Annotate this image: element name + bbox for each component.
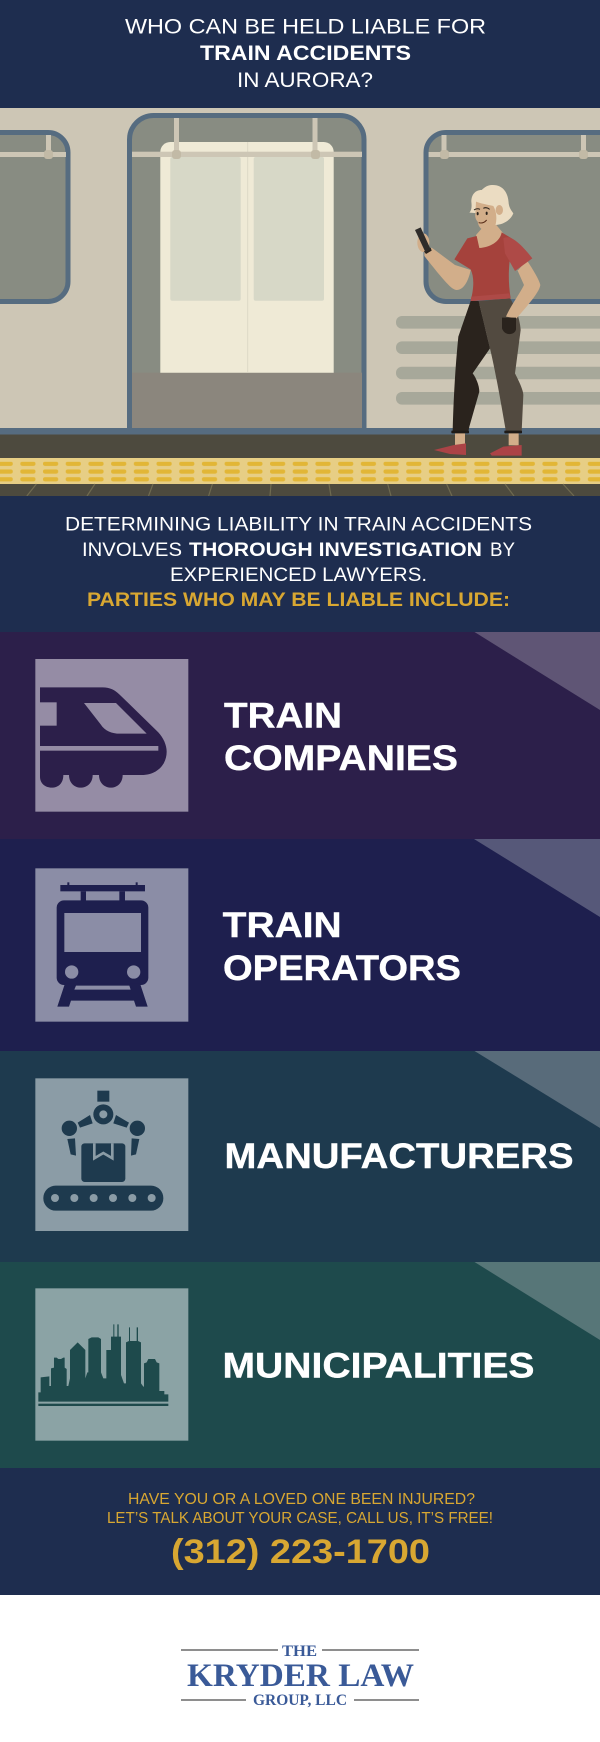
- phone number: (312) 223-1700: [171, 1533, 430, 1571]
- neck: [476, 223, 503, 249]
- arms: [506, 260, 540, 318]
- label: train companies: COMPANIES: [224, 739, 458, 778]
- icon: robotic arm and conveyor: [35, 1078, 188, 1231]
- platform floor: [0, 428, 600, 496]
- title line 2: TRAIN ACCIDENTS: [200, 42, 411, 65]
- intro line 2: [82, 540, 515, 561]
- label: train operators: [223, 906, 461, 988]
- logo: the kryder law group: [0, 1595, 600, 1742]
- panel: train companies: [0, 632, 600, 839]
- label: train operators: TRAIN: [223, 906, 342, 945]
- face: [475, 202, 496, 230]
- label: manufacturers: MANUFACTURERS: [224, 1137, 574, 1176]
- label: train operators: OPERATORS: [223, 949, 461, 988]
- intro line 2: INVOLVES: [82, 540, 182, 561]
- label: municipalities: MUNICIPALITIES: [222, 1347, 534, 1386]
- intro line 1: DETERMINING LIABILITY IN TRAIN ACCIDENTS: [65, 515, 532, 536]
- phone: [415, 227, 431, 252]
- title line 3: IN AURORA?: [237, 69, 373, 92]
- panel: train operators: [0, 839, 600, 1051]
- intro gold line: PARTIES WHO MAY BE LIABLE INCLUDE:: [87, 590, 510, 611]
- call to action section: [0, 1468, 600, 1595]
- train door opening: [130, 116, 364, 428]
- facial features: [474, 208, 490, 223]
- cta line 1: HAVE YOU OR A LOVED ONE BEEN INJURED?: [128, 1491, 475, 1508]
- logo: the kryder law group: GROUP, LLC: [253, 1692, 347, 1709]
- right train window: [426, 132, 600, 302]
- pocket: [502, 318, 516, 334]
- icon: high-speed train: [35, 659, 188, 812]
- title section: [0, 0, 600, 108]
- left train window: [0, 132, 68, 302]
- title line 1: WHO CAN BE HELD LIABLE FOR: [125, 15, 486, 38]
- intro line 2: BY: [490, 540, 515, 561]
- side vents: [396, 316, 600, 405]
- intro line 2: THOROUGH INVESTIGATION: [189, 540, 482, 561]
- intro line 3: EXPERIENCED LAWYERS.: [170, 565, 427, 586]
- icon: city skyline: [35, 1288, 188, 1441]
- panel: manufacturers: [0, 1051, 600, 1262]
- panel: municipalities: [0, 1262, 600, 1468]
- intro section: [0, 496, 600, 632]
- logo: the kryder law group: KRYDER LAW: [187, 1658, 414, 1694]
- hair: [469, 185, 513, 225]
- label: train companies: TRAIN: [224, 697, 342, 736]
- icon: front-view train: [35, 868, 188, 1022]
- logo: the kryder law group: THE: [282, 1643, 317, 1660]
- illustration: train platform scene: [0, 108, 600, 496]
- label: train companies: [224, 697, 458, 778]
- cta line 2: LET’S TALK ABOUT YOUR CASE, CALL US, IT’S FREE!: [107, 1510, 493, 1527]
- shirt: [454, 232, 512, 301]
- legs: [479, 298, 523, 432]
- woman with phone: [415, 185, 540, 456]
